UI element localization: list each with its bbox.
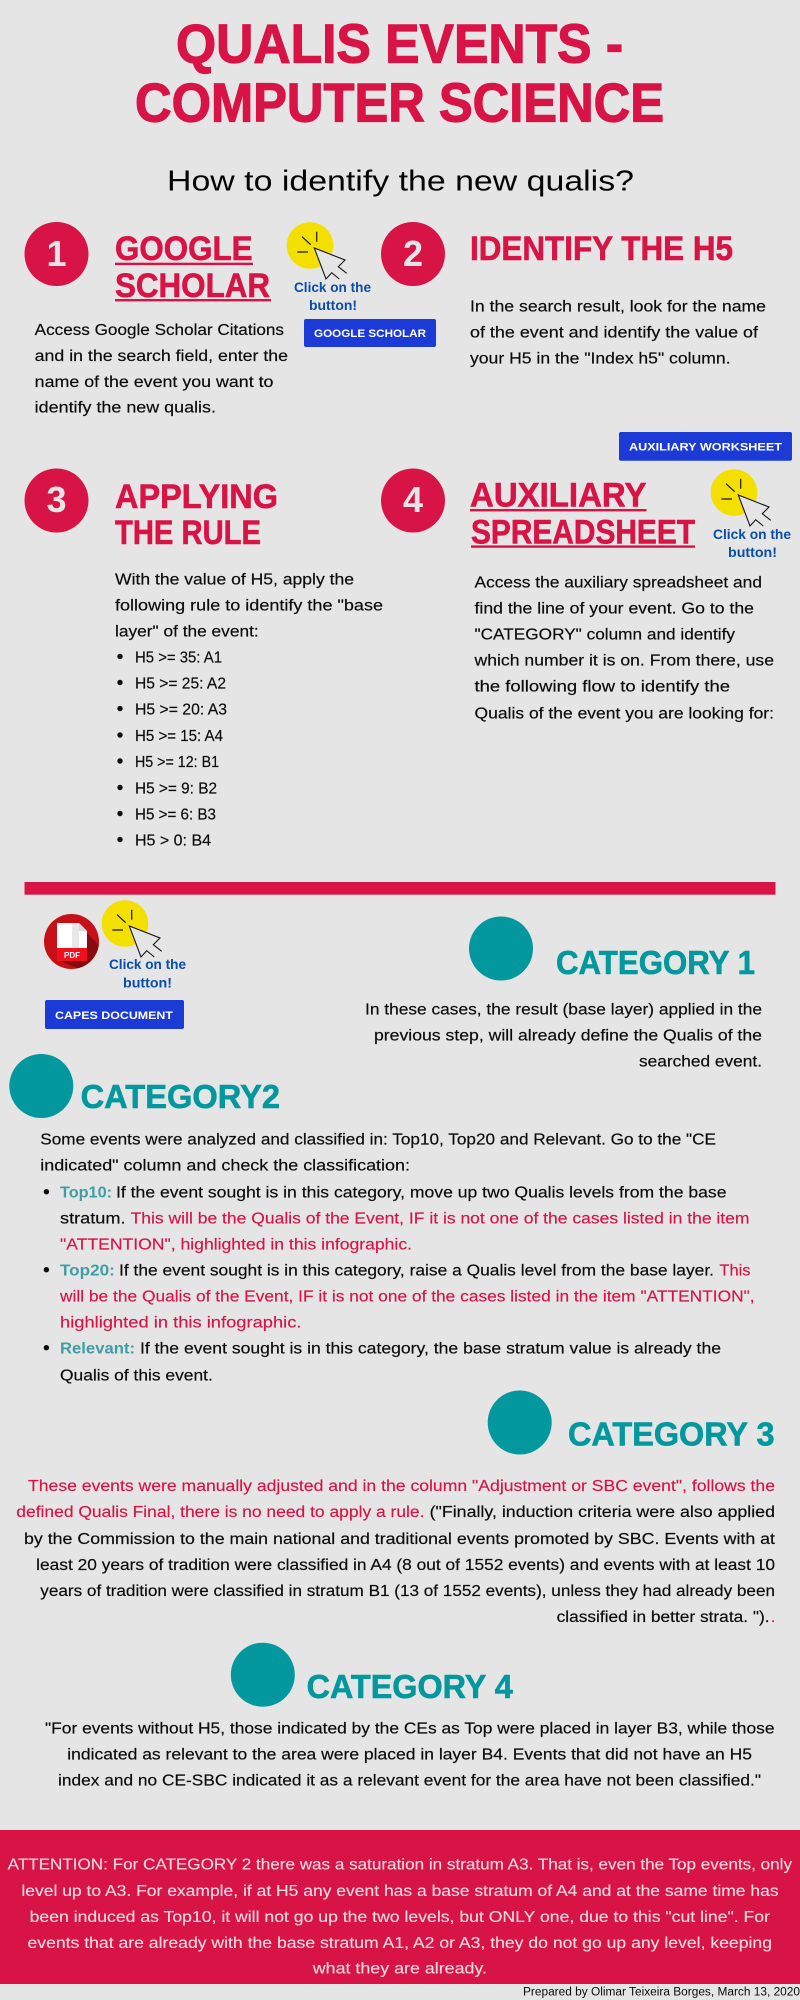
button: auxiliary worksheet: AUXILIARY WORKSHEET <box>629 442 782 454</box>
panel: category 4 <box>45 1643 774 1790</box>
list item: top20 <box>44 1262 755 1331</box>
text: category 1 body: searched event. <box>639 1053 762 1070</box>
text: step 3 body: following rule to identify the "base <box>115 597 383 614</box>
text: step 3 body <box>115 571 383 640</box>
text: step 4 body <box>473 574 774 722</box>
icon: step number 1 <box>24 222 88 286</box>
text: step 1 body: identify the new qualis. <box>35 400 216 417</box>
list: h5 thresholds: H5 >= 15: A4 <box>135 728 223 745</box>
panel: category 3 <box>16 1390 776 1626</box>
text: step 4 body: which number it is on. From there, use <box>473 652 774 669</box>
text: category 3 body: . <box>771 1609 775 1626</box>
text: category 4 body <box>45 1721 774 1790</box>
heading: google scholar: SCHOLAR <box>115 267 270 305</box>
label: click on the button: Click on the <box>294 280 371 295</box>
icon: step number 4 <box>381 468 445 532</box>
list: h5 thresholds: H5 > 0: B4 <box>135 832 211 849</box>
button: capes document <box>45 1000 184 1029</box>
list item: top10 <box>44 1184 749 1253</box>
text: step 1 body: and in the search field, enter the <box>35 348 288 365</box>
heading: identify the h5: IDENTIFY THE H5 <box>470 230 733 268</box>
list: h5 thresholds: H5 >= 35: A1 <box>135 649 222 666</box>
icon: step number 2: 2 <box>403 233 423 274</box>
text: step 1 body: Access Google Scholar Citations <box>35 322 284 339</box>
title: QUALIS EVENTS - <box>176 13 623 75</box>
icon: step number 1: 1 <box>46 233 67 274</box>
text: step 4 body: Qualis of the event you are looking for: <box>474 705 774 722</box>
icon: step number 4: 4 <box>403 479 423 520</box>
heading: applying the rule <box>115 478 278 552</box>
list: h5 thresholds <box>117 649 227 849</box>
heading: category 1: CATEGORY 1 <box>556 944 755 981</box>
heading: category 3: CATEGORY 3 <box>568 1416 774 1453</box>
label: click on the button <box>713 527 791 560</box>
text: category 3 body: ("Finally, induction criteria were also applied <box>430 1504 775 1521</box>
text: attention note: what they are already. <box>312 1961 487 1978</box>
icon: pdf document: PDF <box>64 951 80 960</box>
text: step 2 body: your H5 in the "Index h5" column. <box>470 351 731 368</box>
icon: category 2 circle <box>9 1054 73 1118</box>
icon: click cursor capes document <box>102 900 162 957</box>
icon: click cursor auxiliary spreadsheet <box>711 469 771 526</box>
panel: step 4 auxiliary spreadsheet <box>381 468 774 722</box>
text: category 2 intro <box>40 1131 716 1174</box>
list: h5 thresholds: H5 >= 20: A3 <box>135 701 227 718</box>
heading: google scholar: GOOGLE <box>115 230 252 268</box>
text: category 2 intro: Some events were analyzed and classified in: Top10, Top20 and Relevant. Go to the "CE <box>40 1131 716 1148</box>
title <box>135 13 664 134</box>
heading: category 4: CATEGORY 4 <box>307 1668 513 1705</box>
footer credit: Prepared by Olimar Teixeira Borges, March 13, 2020 <box>523 1986 800 1998</box>
text: step 4 body: find the line of your event. Go to the <box>474 600 754 617</box>
heading: auxiliary spreadsheet <box>470 477 695 552</box>
icon: pdf document <box>44 914 99 969</box>
icon: category 1 circle <box>469 916 533 980</box>
text: step 1 body <box>35 322 288 417</box>
text: step 4 body: the following flow to identify the <box>474 678 730 695</box>
list item: top20: This <box>719 1262 751 1279</box>
text: category 1 body: In these cases, the result (base layer) applied in the <box>365 1001 762 1018</box>
text: category 3 body: These events were manually adjusted and in the column "Adjustment or SBC event", follows the <box>28 1478 775 1495</box>
icon: step number 2 <box>381 222 445 286</box>
list item: top10: This will be the Qualis of the Event, IF it is not one of the cases listed in the item <box>131 1210 750 1227</box>
text: category 3 body <box>16 1478 776 1626</box>
panel: category 2 <box>9 1054 755 1384</box>
heading: category 2: CATEGORY2 <box>81 1078 280 1115</box>
list item: top10: stratum. <box>60 1210 126 1227</box>
list item: top20: Top20: <box>60 1262 115 1279</box>
button: google scholar <box>304 319 436 347</box>
list: h5 thresholds: H5 >= 9: B2 <box>135 780 217 797</box>
label: click on the button <box>294 280 371 313</box>
label: click on the button <box>109 957 186 991</box>
label: click on the button: button! <box>728 545 777 560</box>
text: category 4 body: indicated as relevant to the area were placed in layer B4. Events that did not have an H5 <box>67 1747 752 1764</box>
text: category 2 intro: indicated" column and check the classification: <box>40 1157 410 1174</box>
heading: applying the rule: THE RULE <box>115 514 261 552</box>
list item: top10: "ATTENTION", highlighted in this infographic. <box>60 1236 412 1253</box>
list: h5 thresholds: H5 >= 6: B3 <box>135 806 216 823</box>
button: auxiliary worksheet <box>619 432 792 461</box>
text: attention note: been induced as Top10, it will not go up the two levels, but ONLY one, due to this "cut line". For <box>30 1909 770 1926</box>
button: capes document: CAPES DOCUMENT <box>55 1010 173 1022</box>
text: category 3 body: by the Commission to the main national and traditional events promoted by SBC. Events with at <box>24 1531 776 1548</box>
text: step 2 body: of the event and identify the value of <box>470 325 759 342</box>
text: category 4 body: index and no CE-SBC indicated it as a relevant event for the area have not been classified." <box>58 1773 761 1790</box>
text: category 1 body: previous step, will already define the Qualis of the <box>374 1027 762 1044</box>
title: COMPUTER SCIENCE <box>135 72 664 134</box>
list item: top20: If the event sought is in this category, raise a Qualis level from the base layer. <box>119 1262 714 1279</box>
text: category 4 body: "For events without H5, those indicated by the CEs as Top were placed in layer B3, while those <box>45 1721 774 1738</box>
icon: category 4 circle <box>231 1643 295 1707</box>
heading: auxiliary spreadsheet: SPREADSHEET <box>471 514 695 552</box>
list item: relevant <box>44 1340 721 1384</box>
text: step 3 body: With the value of H5, apply the <box>115 571 354 588</box>
label: click on the button: button! <box>123 976 172 991</box>
text: attention note: ATTENTION: For CATEGORY 2 there was a saturation in stratum A3. That is, even the Top events, only <box>8 1857 792 1874</box>
text: step 1 body: name of the event you want to <box>35 374 274 391</box>
heading: applying the rule: APPLYING <box>115 478 278 516</box>
subtitle: How to identify the new qualis? <box>167 166 634 198</box>
icon: step number 3: 3 <box>46 479 67 520</box>
panel: attention <box>0 1830 800 1984</box>
list item: top20: highlighted in this infographic. <box>60 1314 302 1331</box>
list item: top20: will be the Qualis of the Event, IF it is not one of the cases listed in the item "ATTENTION", <box>59 1288 755 1305</box>
list item: top10: If the event sought is in this category, move up two Qualis levels from the base <box>116 1184 726 1201</box>
panel: step 1 google scholar <box>24 222 288 417</box>
panel: category 1 <box>365 916 762 1070</box>
text: category 3 body: years of tradition were classified in stratum B1 (13 of 1552 events), unless they had already been <box>40 1583 775 1600</box>
text: attention note: level up to A3. For example, if at H5 any event has a base stratum of A4 and at the same time has <box>21 1883 779 1900</box>
text: category 3 body: classified in better strata. "). <box>557 1609 770 1626</box>
label: click on the button: Click on the <box>713 527 791 542</box>
label: click on the button: button! <box>309 298 357 313</box>
text: step 4 body: "CATEGORY" column and identify <box>474 626 735 643</box>
text: category 3 body: defined Qualis Final, there is no need to apply a rule. <box>16 1504 425 1521</box>
text: category 3 body: least 20 years of tradition were classified in A4 (8 out of 1552 events) and events with at least 10 <box>36 1557 775 1574</box>
text: step 2 body: In the search result, look for the name <box>470 299 766 316</box>
text: attention note <box>8 1857 792 1978</box>
heading: auxiliary spreadsheet: AUXILIARY <box>470 477 647 515</box>
panel: step 2 identify the h5 <box>381 222 766 368</box>
list item: relevant: Qualis of this event. <box>60 1367 213 1384</box>
label: click on the button: Click on the <box>109 957 186 972</box>
text: step 2 body <box>470 299 766 368</box>
list: h5 thresholds: H5 >= 25: A2 <box>135 675 226 692</box>
text: step 4 body: Access the auxiliary spreadsheet and <box>474 574 762 591</box>
list: h5 thresholds: H5 >= 12: B1 <box>135 754 219 771</box>
icon: click cursor google scholar <box>287 222 347 279</box>
list item: relevant: If the event sought is in this category, the base stratum value is already the <box>140 1340 721 1357</box>
panel: step 3 applying the rule <box>24 468 383 849</box>
icon: step number 3 <box>24 468 88 532</box>
list item: relevant: Relevant: <box>60 1340 135 1357</box>
list item: top10: Top10: <box>60 1184 112 1201</box>
icon: category 3 circle <box>488 1390 552 1454</box>
text: step 3 body: layer" of the event: <box>115 623 259 640</box>
text: attention note: events that are already with the base stratum A1, A2 or A3, they do not go up any level, keeping <box>28 1935 772 1952</box>
heading: google scholar <box>115 230 271 305</box>
text: category 1 body <box>365 1001 762 1070</box>
button: google scholar: GOOGLE SCHOLAR <box>314 328 426 340</box>
